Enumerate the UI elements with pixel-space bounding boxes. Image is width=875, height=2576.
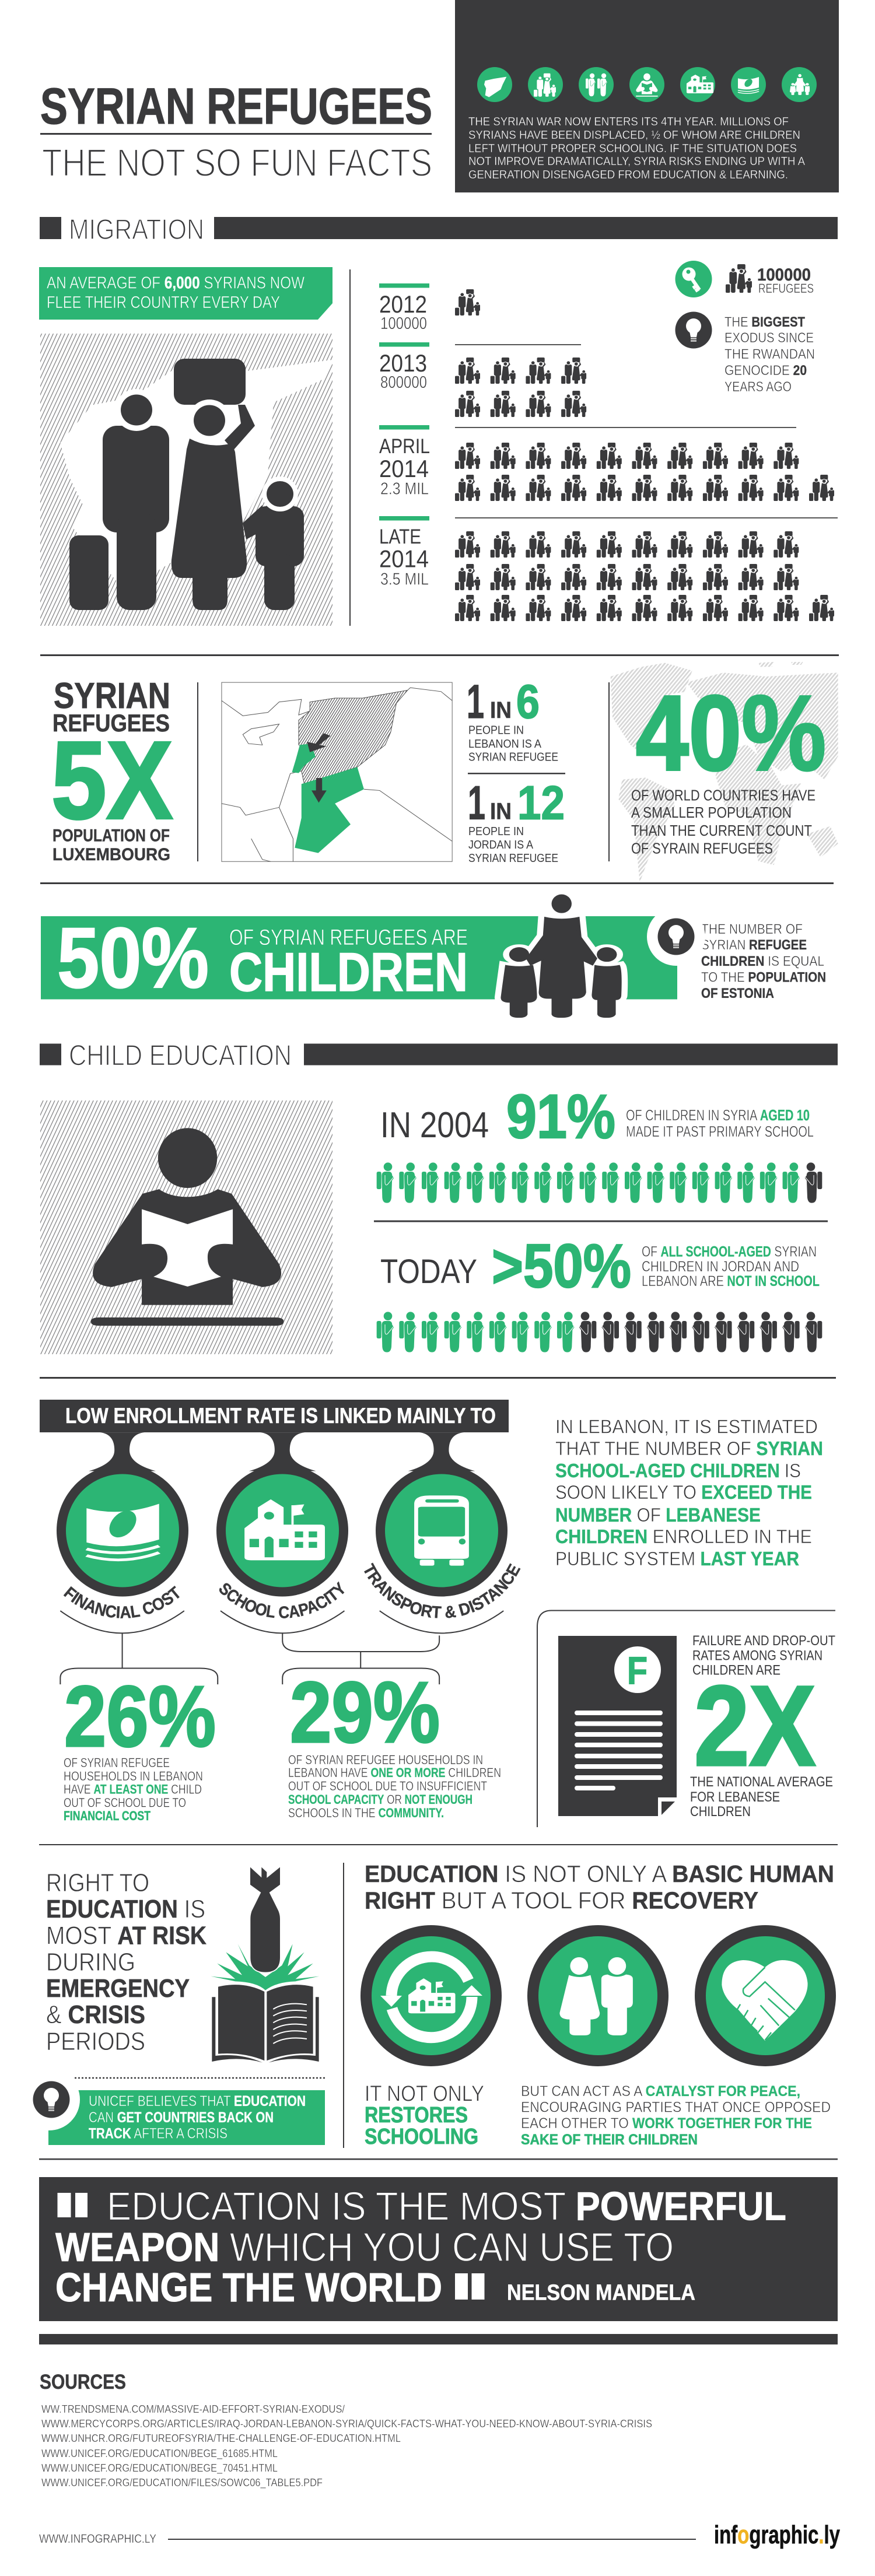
panel: low enrollment causes — [40, 1400, 520, 1823]
stat: 1 in 6: PEOPLE IN — [468, 724, 524, 737]
legend: key: 100000 — [757, 265, 811, 285]
legend: key — [676, 261, 814, 297]
stat: 26 percent — [64, 1669, 216, 1823]
circle: transport and distance: TRANSPORT & DISTANCE — [364, 1563, 520, 1618]
panel: failure rates 2x: FOR LEBANESE — [690, 1789, 780, 1805]
icon: two people circle — [527, 1925, 668, 2066]
panel: failure rates 2x: 2X — [694, 1662, 816, 1789]
stat: 5x luxembourg — [51, 676, 173, 864]
fact: estonia: THE NUMBER OF — [701, 921, 803, 937]
stat: 2004 91 percent — [380, 1081, 814, 1151]
arrow into jordan — [312, 778, 327, 802]
text block: right to education: DURING — [46, 1948, 135, 1976]
fact: estonia — [647, 907, 826, 1001]
stat: 26 percent: HAVE AT LEAST ONE CHILD — [64, 1782, 202, 1796]
circle: financial cost: FINANCIAL COST — [63, 1586, 180, 1618]
fact: biggest exodus: YEARS AGO — [724, 379, 792, 395]
banner: 50 percent children: CHILDREN — [229, 941, 468, 1003]
callout: 6,000 syrians a day: AN AVERAGE OF 6,000 SYRIANS NOW — [47, 274, 305, 293]
stat: today over 50 percent: TODAY — [380, 1253, 477, 1291]
text block: right to education: EDUCATION IS — [46, 1895, 205, 1923]
stat: 40 percent: OF SYRAIN REFUGEES — [631, 840, 773, 857]
stat: 40 percent — [631, 673, 826, 857]
stat: 5x luxembourg: 5X — [51, 719, 173, 842]
fact: biggest exodus: EXODUS SINCE — [724, 330, 814, 346]
stat: 1 in 6: 6 — [516, 675, 540, 728]
circle: school capacity — [216, 1471, 348, 1618]
text block: right to education: MOST AT RISK — [46, 1921, 206, 1950]
quote text: WEAPON WHICH YOU CAN USE TO — [55, 2224, 674, 2270]
text block: right to education: RIGHT TO — [46, 1869, 149, 1897]
stat: 5x luxembourg: SYRIAN — [54, 676, 170, 716]
circle: transport and distance — [364, 1471, 520, 1618]
sources: WWW.UNHCR.ORG/FUTUREOFSYRIA/THE-CHALLENGE-OF-EDUCATION.HTML — [41, 2433, 401, 2444]
footer: WWW.INFOGRAPHIC.LY — [39, 2532, 156, 2546]
text: catalyst for peace: SAKE OF THEIR CHILDREN — [521, 2132, 698, 2148]
title block — [40, 78, 432, 185]
stat: 26 percent: FINANCIAL COST — [64, 1809, 150, 1823]
year 2013: 800000 — [380, 373, 427, 392]
section heading: child education — [40, 1039, 838, 1072]
fact: estonia: TO THE POPULATION — [701, 969, 826, 986]
logo: infographic.ly — [714, 2521, 840, 2549]
stat: today over 50 percent: CHILDREN IN JORDAN AND — [642, 1259, 799, 1275]
quote text: CHANGE THE WORLD — [55, 2265, 442, 2310]
opening quote mark — [57, 2193, 88, 2217]
heading: education tool for recovery — [365, 1860, 834, 1914]
sources — [40, 2371, 652, 2489]
panel: intro dark box — [455, 0, 839, 192]
sources: SOURCES — [40, 2371, 126, 2393]
april 2014: APRIL — [379, 435, 430, 458]
jordan green — [295, 767, 364, 853]
sources: WWW.MERCYCORPS.ORG/ARTICLES/IRAQ-JORDAN-LEBANON-SYRIA/QUICK-FACTS-WHAT-YOU-NEED-KNOW-ABOUT-SYRIA-CRISIS — [41, 2418, 652, 2430]
text: restores schooling — [365, 2082, 484, 2149]
stat: 29 percent: LEBANON HAVE ONE OR MORE CHILDREN — [288, 1765, 501, 1780]
panel: failure rates 2x: RATES AMONG SYRIAN — [692, 1648, 822, 1663]
late 2014: 3.5 MIL — [380, 570, 429, 589]
stat: today over 50 percent: OF ALL SCHOOL-AGED SYRIAN — [642, 1243, 817, 1260]
late 2014: LATE — [379, 525, 421, 548]
year 2012: 2012 — [379, 290, 427, 318]
stat: 29 percent — [288, 1664, 501, 1820]
callout: unicef: CAN GET COUNTRIES BACK ON — [89, 2109, 274, 2126]
fact: biggest exodus: THE BIGGEST — [724, 314, 805, 330]
intro paragraph: NOT IMPROVE DRAMATICALLY, SYRIA RISKS ENDING UP WITH A — [468, 155, 806, 168]
late 2014: 2014 — [379, 545, 429, 573]
late 2014 — [379, 516, 838, 621]
fact: biggest exodus: GENOCIDE 20 — [724, 363, 807, 378]
intro paragraph: LEFT WITHOUT PROPER SCHOOLING. IF THE SITUATION DOES — [468, 142, 797, 155]
text block: right to education: PERIODS — [46, 2027, 145, 2056]
text block: lebanon school-aged children: NUMBER OF LEBANESE — [555, 1504, 761, 1526]
text: restores schooling: IT NOT ONLY — [365, 2082, 484, 2107]
text: catalyst for peace — [521, 2083, 831, 2148]
stat: today over 50 percent: LEBANON ARE NOT IN SCHOOL — [642, 1273, 820, 1289]
stat: 29 percent: SCHOOLS IN THE COMMUNITY. — [288, 1806, 444, 1820]
stat: 29 percent: OUT OF SCHOOL DUE TO INSUFFICIENT — [288, 1779, 487, 1793]
heading banner — [40, 1400, 509, 1432]
year 2012 — [379, 283, 480, 333]
bracket lines — [60, 1611, 503, 1684]
year 2013 — [379, 342, 586, 417]
panel: mandela quote — [39, 2177, 838, 2321]
syria hatched — [299, 691, 408, 784]
quote text: EDUCATION IS THE MOST POWERFUL — [107, 2184, 786, 2229]
stat: 1 in 6: IN — [490, 698, 512, 723]
intro paragraph: GENERATION DISENGAGED FROM EDUCATION & LEARNING. — [468, 169, 788, 181]
legend: key: REFUGEES — [758, 281, 814, 296]
sources: WWW.UNICEF.ORG/EDUCATION/FILES/SOWC06_TABLE5.PDF — [41, 2477, 323, 2489]
footer — [39, 2521, 840, 2549]
fact: estonia: OF ESTONIA — [701, 986, 774, 1001]
stat: today over 50 percent — [380, 1232, 820, 1301]
stat: 1 in 6: 1 — [467, 675, 484, 728]
icon: restore school circle — [360, 1925, 502, 2066]
sources: WWW.UNICEF.ORG/EDUCATION/BEGE_70451.HTML — [41, 2462, 278, 2475]
callout: 6,000 syrians a day: FLEE THEIR COUNTRY EVERY DAY — [47, 293, 280, 312]
stat: 26 percent: OUT OF SCHOOL DUE TO — [64, 1795, 186, 1810]
april 2014: 2.3 MIL — [380, 479, 429, 498]
section heading: migration: MIGRATION — [69, 214, 204, 246]
april 2014 — [379, 425, 834, 501]
text block: lebanon school-aged children: SCHOOL-AGED CHILDREN IS — [555, 1460, 801, 1481]
pictogram: 19 of 20 children — [377, 1162, 822, 1203]
text block: lebanon school-aged children: PUBLIC SYSTEM LAST YEAR — [555, 1548, 799, 1569]
stat: 5x luxembourg: LUXEMBOURG — [52, 845, 170, 864]
world map background — [611, 662, 838, 882]
illustration: child reading — [40, 1101, 332, 1354]
text: catalyst for peace: ENCOURAGING PARTIES THAT ONCE OPPOSED — [521, 2100, 831, 2116]
stat: 1 in 6: LEBANON IS A — [468, 738, 542, 751]
text block: right to education: & CRISIS — [46, 2000, 145, 2029]
stat: 2004 91 percent: 91% — [506, 1081, 615, 1151]
banner: 50 percent children — [41, 910, 677, 1006]
stat: 5x luxembourg: REFUGEES — [52, 709, 170, 737]
stat: 26 percent: 26% — [64, 1669, 216, 1765]
stat: 1 in 12: 1 — [468, 777, 485, 829]
sources: WW.TRENDSMENA.COM/MASSIVE-AID-EFFORT-SYRIAN-EXODUS/ — [41, 2403, 345, 2415]
pictogram: 9 of 20 children — [377, 1312, 822, 1352]
text: restores schooling: SCHOOLING — [365, 2125, 478, 2149]
subtitle: THE NOT SO FUN FACTS — [42, 141, 432, 185]
stat: 29 percent: 29% — [290, 1664, 440, 1761]
arrow into lebanon — [307, 733, 331, 752]
stat: 1 in 12: JORDAN IS A — [468, 839, 534, 851]
attribution: NELSON MANDELA — [507, 2281, 695, 2305]
year 2012: 100000 — [380, 314, 427, 333]
stat: 26 percent: OF SYRIAN REFUGEE — [64, 1755, 170, 1770]
stat: 1 in 6: SYRIAN REFUGEE — [468, 751, 558, 764]
lebanon green — [292, 744, 316, 773]
chart: refugees pictogram timeline — [379, 283, 838, 621]
sources: WWW.UNICEF.ORG/EDUCATION/BEGE_61685.HTML — [41, 2448, 278, 2460]
stat: 1 in 12: PEOPLE IN — [468, 825, 524, 838]
main title: SYRIAN REFUGEES — [40, 78, 432, 135]
stat: 40 percent: OF WORLD COUNTRIES HAVE — [631, 786, 816, 804]
fact: biggest exodus — [676, 311, 815, 395]
heading: education tool for recovery: RIGHT BUT A TOOL FOR RECOVERY — [365, 1887, 758, 1914]
stat: 29 percent: OF SYRIAN REFUGEE HOUSEHOLDS IN — [288, 1753, 483, 1767]
icon: report card: F — [627, 1649, 648, 1692]
fact: estonia: SYRIAN REFUGEE — [701, 937, 807, 953]
panel: failure rates 2x: CHILDREN ARE — [692, 1662, 780, 1678]
panel: failure rates 2x: CHILDREN — [690, 1804, 751, 1820]
stat: 5x luxembourg: POPULATION OF — [52, 826, 170, 846]
stat: 2004 91 percent: MADE IT PAST PRIMARY SCHOOL — [626, 1123, 814, 1140]
text: catalyst for peace: EACH OTHER TO WORK TOGETHER FOR THE — [521, 2115, 812, 2132]
callout: 6,000 syrians a day — [39, 267, 332, 320]
banner: 50 percent children: OF SYRIAN REFUGEES ARE — [229, 926, 468, 950]
callout: unicef: TRACK AFTER A CRISIS — [89, 2125, 228, 2142]
panel: failure rates 2x: THE NATIONAL AVERAGE — [690, 1774, 833, 1790]
stat: 40 percent: THAN THE CURRENT COUNT — [631, 822, 812, 839]
text block: lebanon school-aged children: IN LEBANON, IT IS ESTIMATED — [555, 1416, 818, 1438]
circle: school capacity: SCHOOL CAPACITY — [219, 1582, 344, 1618]
stat: 1 in 12: SYRIAN REFUGEE — [468, 852, 558, 865]
text block: lebanon school-aged children: SOON LIKELY TO EXCEED THE — [555, 1481, 812, 1503]
text: restores schooling: RESTORES — [365, 2103, 468, 2128]
section heading: migration — [40, 214, 838, 246]
stat: 26 percent: HOUSEHOLDS IN LEBANON — [64, 1769, 203, 1783]
closing quote mark — [455, 2273, 484, 2300]
stat: 1 in 12 — [468, 777, 565, 865]
icon: report card — [558, 1636, 677, 1817]
stat: 40 percent: A SMALLER POPULATION — [631, 804, 792, 821]
callout: unicef: UNICEF BELIEVES THAT EDUCATION — [89, 2093, 306, 2109]
text block: lebanon school-aged children — [555, 1416, 823, 1569]
text block: lebanon school-aged children: CHILDREN ENROLLED IN THE — [555, 1526, 812, 1547]
intro paragraph: SYRIANS HAVE BEEN DISPLACED, ½ OF WHOM ARE CHILDREN — [468, 129, 800, 142]
stat: 1 in 6 — [467, 675, 558, 764]
illustration: mother with two children — [501, 895, 622, 1018]
illustration: family on hatched syria map — [40, 334, 335, 626]
quote text — [55, 2184, 786, 2310]
intro paragraph — [468, 115, 806, 181]
text block: right to education: EMERGENCY — [46, 1974, 190, 2003]
stat: 2004 91 percent: OF CHILDREN IN SYRIA AGED 10 — [626, 1106, 810, 1124]
stat: 1 in 12: IN — [490, 799, 512, 825]
callout: unicef — [18, 2069, 326, 2145]
map: syria lebanon jordan — [222, 682, 452, 861]
april 2014: 2014 — [379, 455, 429, 482]
stat: 1 in 12: 12 — [517, 777, 565, 829]
heading banner: LOW ENROLLMENT RATE IS LINKED MAINLY TO — [65, 1404, 496, 1428]
icon: bomb hitting book — [211, 1867, 319, 2063]
text block: lebanon school-aged children: THAT THE NUMBER OF SYRIAN — [555, 1438, 823, 1459]
icon row: seven green circles — [477, 67, 817, 102]
panel: failure rates 2x — [537, 1611, 835, 1827]
stat: 40 percent: 40% — [636, 673, 826, 793]
heading: education tool for recovery: EDUCATION IS NOT ONLY A BASIC HUMAN — [365, 1860, 834, 1887]
stat: today over 50 percent: >50% — [492, 1232, 631, 1301]
stat: 29 percent: SCHOOL CAPACITY OR NOT ENOUGH — [288, 1792, 473, 1807]
banner: 50 percent children: 50% — [57, 910, 209, 1006]
connectors — [89, 1432, 475, 1471]
intro paragraph: THE SYRIAN WAR NOW ENTERS ITS 4TH YEAR. MILLIONS OF — [468, 115, 789, 128]
year 2013: 2013 — [379, 349, 427, 377]
fact: estonia: CHILDREN IS EQUAL — [701, 954, 824, 969]
panel: failure rates 2x: FAILURE AND DROP-OUT — [692, 1633, 835, 1649]
icon: handshake heart circle — [695, 1925, 836, 2066]
stat: 2004 91 percent: IN 2004 — [380, 1105, 489, 1145]
text: catalyst for peace: BUT CAN ACT AS A CATALYST FOR PEACE, — [521, 2083, 800, 2100]
fact: biggest exodus: THE RWANDAN — [724, 346, 815, 362]
circle: financial cost — [57, 1471, 188, 1618]
text block: right to education — [46, 1869, 206, 2056]
section heading: child education: CHILD EDUCATION — [69, 1039, 292, 1072]
